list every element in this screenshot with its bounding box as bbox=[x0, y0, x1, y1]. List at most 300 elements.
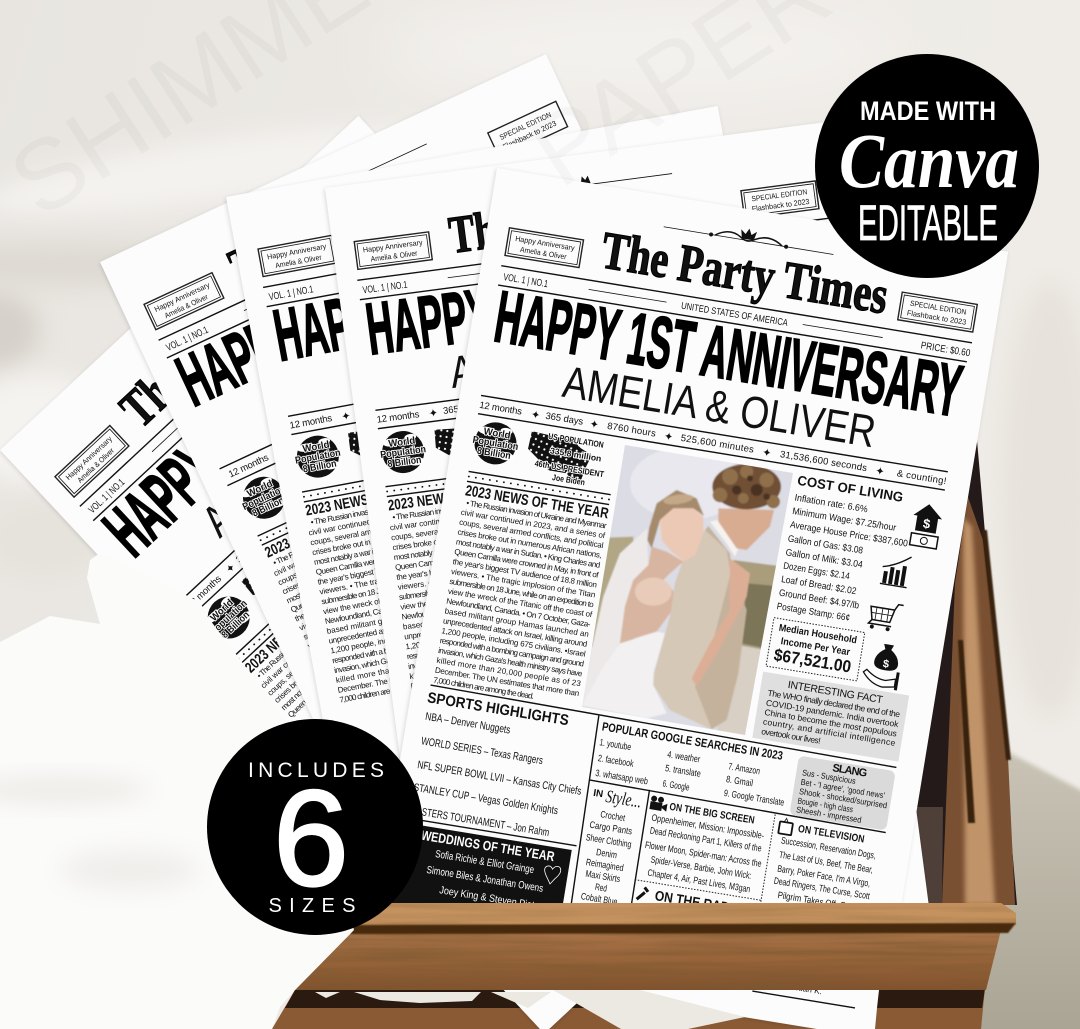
panel: cost of living: Loaf of Bread: $2.02 bbox=[780, 574, 857, 597]
stamp: special edition bbox=[898, 292, 977, 332]
section rules bbox=[392, 685, 897, 997]
panel: cost of living: Average House Price: $387,600 bbox=[789, 520, 908, 550]
globe: 8 Billion bbox=[220, 610, 252, 641]
sheet bbox=[325, 122, 930, 979]
news body text: view the wreck of the Titanic off the coast of bbox=[447, 587, 594, 619]
news text: viewers. • The tragic implosion of the Titan bbox=[319, 561, 464, 596]
news text: responded with a bombing campaign and ground bbox=[331, 630, 477, 665]
news text: civil war continued in 2023, and a series of bbox=[389, 504, 536, 532]
news text: Queen Camilla were crowned in May, in front of bbox=[395, 544, 541, 572]
news body text: civil war continued in 2023, and a series of bbox=[460, 508, 606, 540]
volume line: VOL. 1 | NO.1 bbox=[268, 284, 315, 303]
callout: median household income: Median Household bbox=[778, 623, 858, 646]
badge: includes 6 sizes bbox=[207, 719, 423, 935]
globe: world population: Population bbox=[472, 435, 519, 453]
white cloth in the foreground bbox=[0, 553, 354, 1029]
news text: based militant group Hamas launched an bbox=[326, 600, 471, 636]
stamp: happy anniversary: Happy Anniversary bbox=[515, 234, 576, 253]
in style list: Denim bbox=[595, 847, 618, 861]
icon: house and dollar bbox=[909, 502, 944, 549]
news text: 7,000 children are among the dead. bbox=[339, 677, 441, 705]
news heading: 2023 NEWS OF THE YEAR bbox=[304, 476, 450, 520]
badge line: Canva: Canva bbox=[839, 117, 1019, 204]
globe bbox=[378, 428, 429, 476]
on the radio: ON THE RADIO bbox=[654, 887, 743, 917]
popular google searches: 8. Gmail bbox=[725, 774, 754, 789]
map bbox=[241, 538, 319, 616]
popular google searches: 7. Amazon bbox=[727, 761, 761, 777]
panel: cost of living bbox=[776, 473, 916, 631]
lower content bbox=[175, 284, 632, 726]
volume line bbox=[357, 218, 831, 300]
on television bbox=[771, 820, 880, 916]
in style list: Reimagined bbox=[585, 857, 624, 874]
on the big screen: Chapter 4, Air, Past Lives, M3gan bbox=[647, 868, 751, 895]
panel: interesting fact bbox=[752, 672, 909, 762]
news body text: unprecedented attack on Israel, killing around bbox=[442, 616, 588, 649]
news text: Queen Camilla were crowned in May, in front of bbox=[289, 544, 426, 614]
panel: interesting fact: INTERESTING FACT bbox=[787, 679, 884, 706]
stamp: special edition: SPECIAL EDITION bbox=[751, 187, 808, 203]
news text: • The Russian invasion of Ukraine and Myanmar bbox=[310, 492, 452, 527]
panel: cost of living: Inflation rate: 6.6% bbox=[794, 493, 869, 515]
news text: coups, several armed conflicts, and political bbox=[266, 591, 379, 698]
sports highlights: MASTERS TOURNAMENT – Jon Rahm bbox=[409, 804, 550, 839]
news text: the year's biggest TV audience of 18.8 million bbox=[317, 551, 462, 587]
news text: invasion, which Gaza's health ministry says have bbox=[408, 643, 554, 671]
on the radio bbox=[637, 884, 743, 917]
in style list bbox=[576, 784, 643, 909]
sports: SPORTS HIGHLIGHTS bbox=[410, 688, 554, 724]
bride's hair highlight bbox=[663, 494, 694, 505]
globe bbox=[234, 469, 294, 527]
panel: interesting fact: COVID-19 pandemic. India overtook bbox=[765, 698, 900, 729]
news heading: 2023 NEWS OF THE YEAR bbox=[242, 565, 360, 676]
sheet bbox=[226, 106, 863, 982]
news body text: 1,200 people, including 675 civilians. •Israel bbox=[441, 626, 587, 659]
news text: coups, several armed conflicts, and political bbox=[391, 514, 537, 542]
stamp bbox=[258, 235, 337, 277]
panel: weddings of the year: Sofia Richie & Elliot Grainge bbox=[434, 848, 535, 876]
globe: World bbox=[388, 435, 416, 450]
callout: median household income bbox=[766, 618, 865, 681]
bride's dress bbox=[582, 632, 667, 718]
time band: 365 days bbox=[234, 531, 269, 565]
news text: civil war continued in 2023, and a series of bbox=[259, 584, 372, 690]
icon: money bag on hand: $ bbox=[882, 658, 890, 671]
stamp: Amelia & Oliver bbox=[275, 253, 323, 270]
newspaper copy 2 bbox=[100, 53, 885, 985]
time band: 365 days bbox=[442, 401, 482, 417]
time band: ✦ bbox=[663, 431, 674, 444]
in style list: Style... bbox=[604, 786, 643, 812]
sports: WORLD SERIES – Texas Rangers bbox=[418, 737, 541, 765]
icon: house and dollar: $ bbox=[922, 516, 932, 532]
volume, location and price line: VOL. 1 | NO.1 bbox=[503, 272, 549, 290]
news text: the year's biggest TV audience of 18.8 million bbox=[293, 554, 430, 624]
stamp: special edition: SPECIAL EDITION bbox=[498, 110, 553, 142]
globe: World bbox=[209, 597, 236, 624]
stamp bbox=[354, 232, 432, 269]
globe bbox=[198, 586, 260, 649]
stamp: Happy Anniversary bbox=[362, 238, 423, 255]
groom's face and neck bbox=[718, 508, 774, 550]
stamp bbox=[144, 273, 224, 330]
news body text: responded with a bombing campaign and ground bbox=[439, 636, 585, 669]
names: AMELIA & OLIVER bbox=[559, 356, 879, 457]
bride's back bbox=[620, 547, 683, 643]
star band bbox=[302, 466, 445, 502]
stamp: Happy Anniversary bbox=[153, 280, 211, 314]
news text: • The Russian invasion of Ukraine and Myanmar bbox=[255, 577, 365, 680]
lower content bbox=[220, 271, 730, 653]
panel: interesting fact: The WHO finally declared the end of the bbox=[767, 688, 901, 719]
volume line: VOL. 1 | NO.1 bbox=[165, 325, 210, 354]
globe: Population bbox=[241, 484, 287, 513]
footer text and rule bbox=[752, 976, 857, 1008]
panel: interesting fact: China to become the most populous bbox=[764, 707, 898, 738]
groom's curly hair bbox=[712, 464, 781, 509]
stamp: Amelia & Oliver bbox=[163, 292, 210, 320]
news text: most notably a war in Sudan. • King Charles and bbox=[313, 532, 458, 567]
time band: 31,536,600 seconds bbox=[779, 449, 868, 474]
sheet bbox=[368, 168, 1008, 1029]
news text: civil war continued in 2023, and a series of bbox=[272, 508, 409, 578]
on the big screen: ON THE BIG SCREEN bbox=[669, 801, 755, 827]
stamp: special edition bbox=[488, 101, 568, 158]
news heading: 2023 NEWS OF THE YEAR bbox=[387, 479, 533, 514]
popular google searches: 2. facebook bbox=[597, 753, 634, 770]
panel: slang: Sus - Suspicious bbox=[802, 767, 856, 786]
on television: Barry, Poker Face, I'm A Virgo, bbox=[777, 864, 871, 890]
time band: 12 months bbox=[227, 452, 271, 480]
sports highlights: NBA – Denver Nuggets bbox=[424, 711, 512, 737]
news text: crises broke out in numerous African nations, bbox=[273, 599, 385, 705]
news text: based militant group Hamas launched an bbox=[402, 604, 548, 632]
bride's hair bbox=[647, 490, 704, 548]
news text: most notably a war in Sudan. • King Charles and bbox=[285, 536, 421, 605]
popular google searches: 5. translate bbox=[664, 763, 702, 780]
sports highlights: STANLEY CUP – Vegas Golden Knights bbox=[413, 782, 559, 817]
time band bbox=[175, 284, 533, 620]
news text: killed more than 20,000 people as of 23 bbox=[335, 649, 481, 685]
in style list: Sheer Clothing bbox=[585, 832, 632, 851]
ornament bbox=[271, 144, 427, 217]
news text: December. The UN estimates that more than bbox=[337, 659, 482, 695]
stamp: special edition: Flashback to 2023 bbox=[906, 308, 967, 327]
map bbox=[347, 421, 418, 478]
globe: Population bbox=[380, 444, 427, 461]
wooden box: front board bbox=[295, 903, 1016, 990]
icon: money bag on hand bbox=[861, 641, 904, 690]
news body text: most notably a war in Sudan. • King Charles and bbox=[455, 537, 601, 570]
volume line bbox=[159, 142, 593, 358]
stamp: special edition: Flashback to 2023 bbox=[751, 197, 810, 213]
news text: coups, several armed conflicts, and political bbox=[310, 512, 455, 547]
on the big screen: Spider-Verse, Barbie, John Wick: bbox=[650, 855, 752, 882]
stamp: special edition: SPECIAL EDITION bbox=[909, 299, 967, 317]
badge numeral: 6 bbox=[273, 762, 349, 914]
masthead: The Party bbox=[109, 283, 270, 438]
masthead: The Party Times bbox=[597, 221, 892, 325]
stamp: Amelia & Oliver bbox=[75, 446, 116, 485]
time band: ✦ bbox=[224, 561, 239, 576]
masthead: The Party bbox=[347, 180, 520, 267]
news text: Newfoundland, Canada. • On 7 October, Gaza- bbox=[401, 594, 547, 622]
time band: ✦ bbox=[761, 447, 772, 460]
stamp: Happy Anniversary bbox=[266, 242, 327, 261]
time band: ✦ bbox=[340, 410, 352, 424]
globe: world population: 8 Billion bbox=[476, 446, 511, 462]
icon: shopping cart bbox=[868, 600, 904, 633]
watermark bbox=[0, 0, 905, 238]
time band bbox=[478, 395, 948, 490]
dotted dividers bbox=[621, 794, 775, 984]
stamp: Happy Anniversary bbox=[64, 434, 114, 482]
stamp: happy anniversary bbox=[505, 228, 584, 268]
time band: 12 months bbox=[479, 400, 523, 418]
on the big screen: Dead Reckoning Part 1, Killers of the bbox=[649, 825, 762, 855]
callout: median household income: Income Per Year bbox=[780, 636, 851, 658]
map: US population: 335.8 million bbox=[549, 445, 602, 464]
panel: slang bbox=[789, 756, 896, 831]
news text bbox=[388, 494, 558, 701]
sheet bbox=[100, 54, 883, 985]
globe bbox=[291, 432, 344, 481]
in style list: Cargo Pants bbox=[589, 820, 633, 837]
volume line: VOL. 1 | NO.1 bbox=[362, 280, 408, 296]
on the big screen: Oppenheimer, Mission: Impossible- bbox=[651, 813, 765, 842]
badge: made with Canva editable bbox=[815, 54, 1039, 278]
news text: crises broke out in numerous African nations, bbox=[281, 526, 417, 596]
news text: crises broke out in numerous African nations, bbox=[392, 524, 538, 552]
stamp bbox=[55, 426, 129, 497]
news text: viewers. • The tragic implosion of the Titan bbox=[298, 563, 434, 633]
news text: crises broke out in numerous African nations, bbox=[311, 522, 457, 557]
star band bbox=[467, 471, 611, 505]
groom's shirt bbox=[710, 520, 738, 557]
icon: television bbox=[778, 817, 794, 835]
panel: cost of living: Gallon of Milk: $3.04 bbox=[785, 547, 863, 571]
news body text: coups, several armed conflicts, and political bbox=[459, 518, 604, 550]
time band: ✦ bbox=[874, 465, 885, 479]
time band: ✦ bbox=[589, 418, 600, 432]
stamp: special edition: Flashback to 2023 bbox=[501, 119, 558, 151]
panel: slang: Sheesh - impressed bbox=[795, 804, 862, 825]
on the big screen bbox=[640, 798, 769, 896]
news body text: crises broke out in numerous African nations, bbox=[457, 527, 602, 560]
sheet bbox=[0, 116, 903, 1029]
globe: world population: World bbox=[483, 426, 511, 442]
in style list: Cobalt Blue bbox=[580, 891, 618, 908]
volume, location and price line: PRICE: $0.60 bbox=[920, 340, 971, 359]
news text: submersible on 18 June, while on an expedition to bbox=[398, 574, 545, 602]
globe: World bbox=[245, 478, 275, 500]
panel: slang: Shook - shocked/surprised bbox=[798, 786, 888, 810]
news text: unprecedented attack on Israel, killing around bbox=[404, 613, 550, 641]
volume line bbox=[80, 182, 441, 521]
in style list: Maxi Skirts bbox=[585, 869, 621, 885]
bride's shoulder highlight bbox=[635, 578, 672, 606]
in style list: Red bbox=[594, 882, 608, 895]
time band: 12 months bbox=[289, 413, 333, 432]
globe: world population bbox=[469, 419, 522, 468]
stamp: happy anniversary: Amelia & Oliver bbox=[519, 245, 568, 261]
newspaper copy 1 (back) bbox=[0, 112, 906, 1029]
globe: 8 Billion bbox=[387, 455, 422, 470]
news body text: Newfoundland, Canada. • On 7 October, Gaza- bbox=[446, 597, 591, 629]
news text bbox=[252, 576, 400, 720]
panel: cost of living: Postage Stamp: 66¢ bbox=[776, 601, 851, 624]
news body text: submersible on 18 June, while on an expedition to bbox=[449, 577, 595, 609]
on television: Succession, Reservation Dogs, bbox=[780, 835, 877, 862]
icon: rising bar chart bbox=[880, 553, 912, 588]
news text: • The Russian invasion of Ukraine and Myanmar bbox=[392, 494, 534, 522]
panel: weddings of the year: WEDDINGS OF THE YEAR bbox=[420, 828, 556, 864]
time band: 8760 hours bbox=[606, 421, 657, 440]
news text: civil war continued in 2023, and a series of bbox=[308, 502, 454, 537]
newspaper copy 3 bbox=[226, 106, 863, 982]
news body text: December. The UN estimates that more than bbox=[434, 666, 580, 698]
sports highlights: WORLD SERIES – Texas Rangers bbox=[420, 735, 544, 767]
news text: Newfoundland, Canada. • On 7 October, Gaza- bbox=[324, 590, 470, 626]
globe: 8 Billion bbox=[251, 495, 286, 519]
news body text: killed more than 20,000 people as of 23 bbox=[436, 656, 582, 688]
panel: weddings of the year: Simone Biles & Jonathan Owens bbox=[426, 864, 544, 895]
map: US population: US POPULATION bbox=[548, 431, 604, 450]
sports: NBA – Denver Nuggets bbox=[414, 717, 501, 740]
popular google searches: 3. whatsapp web bbox=[595, 768, 649, 787]
news text: most notably a war in Sudan. • King Charles and bbox=[393, 534, 539, 562]
news heading: 2023 NEWS OF THE YEAR bbox=[464, 482, 610, 522]
map: US population: 46th US PRESIDENT bbox=[534, 458, 605, 479]
globe: 8 Billion bbox=[302, 458, 337, 475]
badge line: includes: INCLUDES bbox=[248, 759, 384, 782]
veil bbox=[582, 528, 648, 705]
news text: 7,000 children are among the dead. bbox=[412, 679, 514, 701]
panel: interesting fact: overtook our lives! bbox=[761, 726, 821, 746]
popular google searches: 4. weather bbox=[667, 749, 701, 766]
popular google searches: POPULAR GOOGLE SEARCHES IN 2023 bbox=[601, 719, 784, 763]
news text: coups, several armed conflicts, and political bbox=[277, 517, 413, 587]
news text: unprecedented attack on Israel, killing around bbox=[328, 610, 473, 646]
map bbox=[434, 422, 503, 476]
time band: 12 months bbox=[376, 409, 420, 426]
map: US population bbox=[523, 428, 610, 490]
in style list: Crochet bbox=[599, 809, 626, 824]
time band: ✦ bbox=[275, 445, 288, 460]
time band bbox=[288, 331, 753, 435]
names: AMELIA & OLIVER bbox=[192, 294, 458, 546]
time band: & counting! bbox=[896, 468, 947, 487]
news text: view the wreck of the Titanic off the coast of bbox=[322, 581, 468, 616]
panel: interesting fact: country, and artificial intelligence bbox=[762, 716, 896, 748]
on television: Pilgrim Takes Off, Gen V bbox=[777, 890, 863, 915]
tan pages behind the stack bbox=[898, 813, 924, 893]
panel: cost of living: Gallon of Gas: $3.08 bbox=[787, 533, 864, 557]
time band: ✦ bbox=[428, 407, 439, 420]
icon: movie camera bbox=[649, 795, 668, 812]
news text: • The Russian invasion of Ukraine and Myanmar bbox=[272, 499, 405, 567]
news text: killed more than 20,000 people as of 23 bbox=[409, 653, 555, 681]
time band: 365 days bbox=[545, 411, 584, 428]
on television: ON TELEVISION bbox=[797, 823, 865, 846]
in style list: IN bbox=[592, 788, 604, 800]
star band bbox=[258, 475, 392, 545]
popular google searches bbox=[594, 719, 793, 810]
news text: viewers. • The tragic implosion of the Titan bbox=[397, 564, 543, 592]
sports highlights: NFL SUPER BOWL LVII – Kansas City Chiefs bbox=[417, 759, 583, 798]
sports bbox=[410, 682, 590, 765]
news text bbox=[268, 499, 443, 651]
badge line: sizes: SIZES bbox=[268, 895, 356, 917]
panel: cost of living: Minimum Wage: $7.25/hour bbox=[791, 506, 897, 534]
popular google searches: 1. youtube bbox=[599, 737, 632, 753]
panel: slang: Bougie - high class bbox=[797, 795, 854, 814]
bride's arm and hand bbox=[692, 558, 750, 687]
star band bbox=[386, 468, 530, 497]
news text: invasion, which Gaza's health ministry says have bbox=[333, 640, 479, 675]
news body text: viewers. • The tragic implosion of the Titan bbox=[450, 567, 596, 599]
map: US population: Joe Biden bbox=[551, 472, 586, 487]
globe: Population bbox=[208, 598, 250, 638]
news text: view the wreck of the Titanic off the coast of bbox=[400, 584, 546, 612]
masthead: The Party bbox=[446, 186, 617, 265]
time band bbox=[375, 349, 847, 429]
groom's sleeve bbox=[653, 530, 731, 729]
bride's face bbox=[660, 508, 703, 562]
news body text: based militant group Hamas launched an bbox=[444, 606, 590, 639]
on television: The Last of Us, Beef, The Bear, bbox=[778, 850, 874, 876]
footer text and rule: and Sebastian K. bbox=[758, 977, 823, 996]
volume, location and price line bbox=[498, 266, 972, 362]
panel: cost of living: COST OF LIVING bbox=[796, 473, 904, 505]
volume, location and price line: UNITED STATES OF AMERICA bbox=[680, 301, 789, 329]
news text: 1,200 people, including 675 civilians. •Israel bbox=[330, 620, 475, 655]
time band: 525,600 minutes bbox=[680, 433, 755, 456]
panel: cost of living: Dozen Eggs: $2.14 bbox=[783, 561, 850, 582]
masthead: The Party bbox=[221, 175, 395, 297]
groom's jacket body bbox=[694, 526, 748, 730]
photo background bbox=[582, 445, 793, 735]
news body text bbox=[433, 498, 608, 708]
news body text: • The Russian invasion of Ukraine and Myanmar bbox=[466, 499, 608, 530]
globe: Population bbox=[294, 448, 342, 467]
news text: the year's biggest TV audience of 18.8 million bbox=[396, 554, 542, 582]
time band bbox=[220, 271, 652, 486]
news heading: 2023 NEWS OF THE YEAR bbox=[262, 485, 401, 561]
stamp: special edition bbox=[741, 181, 819, 218]
stamp: Amelia & Oliver bbox=[370, 248, 418, 264]
on television: Dead Ringers, The Curse, Scott bbox=[773, 876, 871, 902]
popular google searches: 6. Google bbox=[662, 778, 690, 794]
news body text: invasion, which Gaza's health ministry says have bbox=[438, 646, 584, 678]
star band bbox=[234, 558, 347, 663]
news text: Queen Camilla were crowned in May, in front of bbox=[286, 613, 400, 720]
news text: submersible on 18 June, while on an expedition to bbox=[321, 571, 466, 606]
news text: submersible on 18 June, while on an expedition to bbox=[302, 572, 439, 642]
newspaper copy 5: main front page bbox=[368, 168, 1008, 1029]
panel: weddings of the year bbox=[387, 822, 572, 949]
volume line: VOL. 1 | NO.1 bbox=[87, 477, 127, 516]
callout: median household income: $67,521.00 bbox=[772, 645, 853, 677]
panel: cost of living: Ground Beef: $4.97/lb bbox=[778, 588, 860, 612]
wooden box: inner wall, side rim and base bbox=[272, 440, 1017, 1029]
news body text: 7,000 children are among the dead. bbox=[433, 676, 535, 701]
news text: December. The UN estimates that more than bbox=[410, 663, 556, 691]
news body text: the year's biggest TV audience of 18.8 million bbox=[452, 557, 598, 590]
wooden box: right of base in front of paper bbox=[875, 988, 985, 1029]
